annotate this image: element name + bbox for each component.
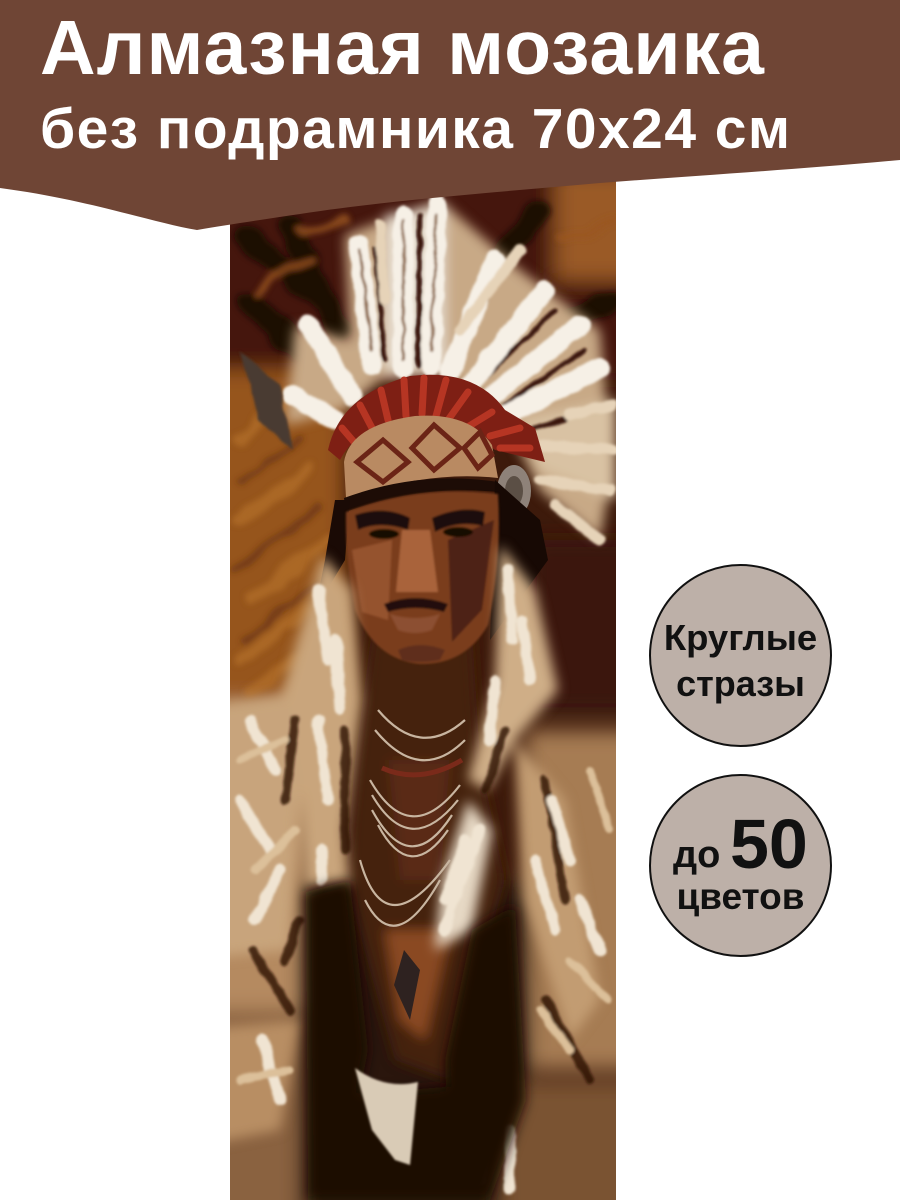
- badge: up to 50 colors: до: [673, 834, 720, 876]
- dark hanging strands: [306, 880, 526, 1200]
- necklaces: [360, 710, 465, 926]
- hair and side shadow: [320, 500, 349, 584]
- title: Алмазная мозаика: [40, 5, 765, 91]
- bone pendant: [355, 1068, 418, 1165]
- fur strokes: [240, 570, 610, 1190]
- fur underlayer: [230, 542, 602, 1146]
- subtitle: без подрамника 70х24 см: [40, 97, 792, 161]
- badge: up to 50 colors: цветов: [676, 876, 805, 917]
- badge: round rhinestones: Круглые: [664, 617, 817, 658]
- headdress feathers: [292, 205, 612, 540]
- header banner: [0, 0, 900, 230]
- concho: [498, 465, 531, 508]
- face: [346, 491, 499, 664]
- dark feather at left: [240, 350, 292, 450]
- red beaded band: [328, 375, 545, 462]
- feather mass underlayer: [285, 200, 616, 540]
- badge: round rhinestones: стразы: [676, 663, 805, 704]
- background washes: [230, 182, 616, 1200]
- badge: round rhinestones: [649, 564, 832, 747]
- badge: up to 50 colors: [649, 774, 832, 957]
- forehead band: [344, 416, 498, 498]
- neck and chest: [345, 630, 505, 1080]
- badge: up to 50 colors: 50: [730, 805, 808, 883]
- painterly streaks: [235, 210, 612, 690]
- painting: chief portrait: [230, 182, 832, 1200]
